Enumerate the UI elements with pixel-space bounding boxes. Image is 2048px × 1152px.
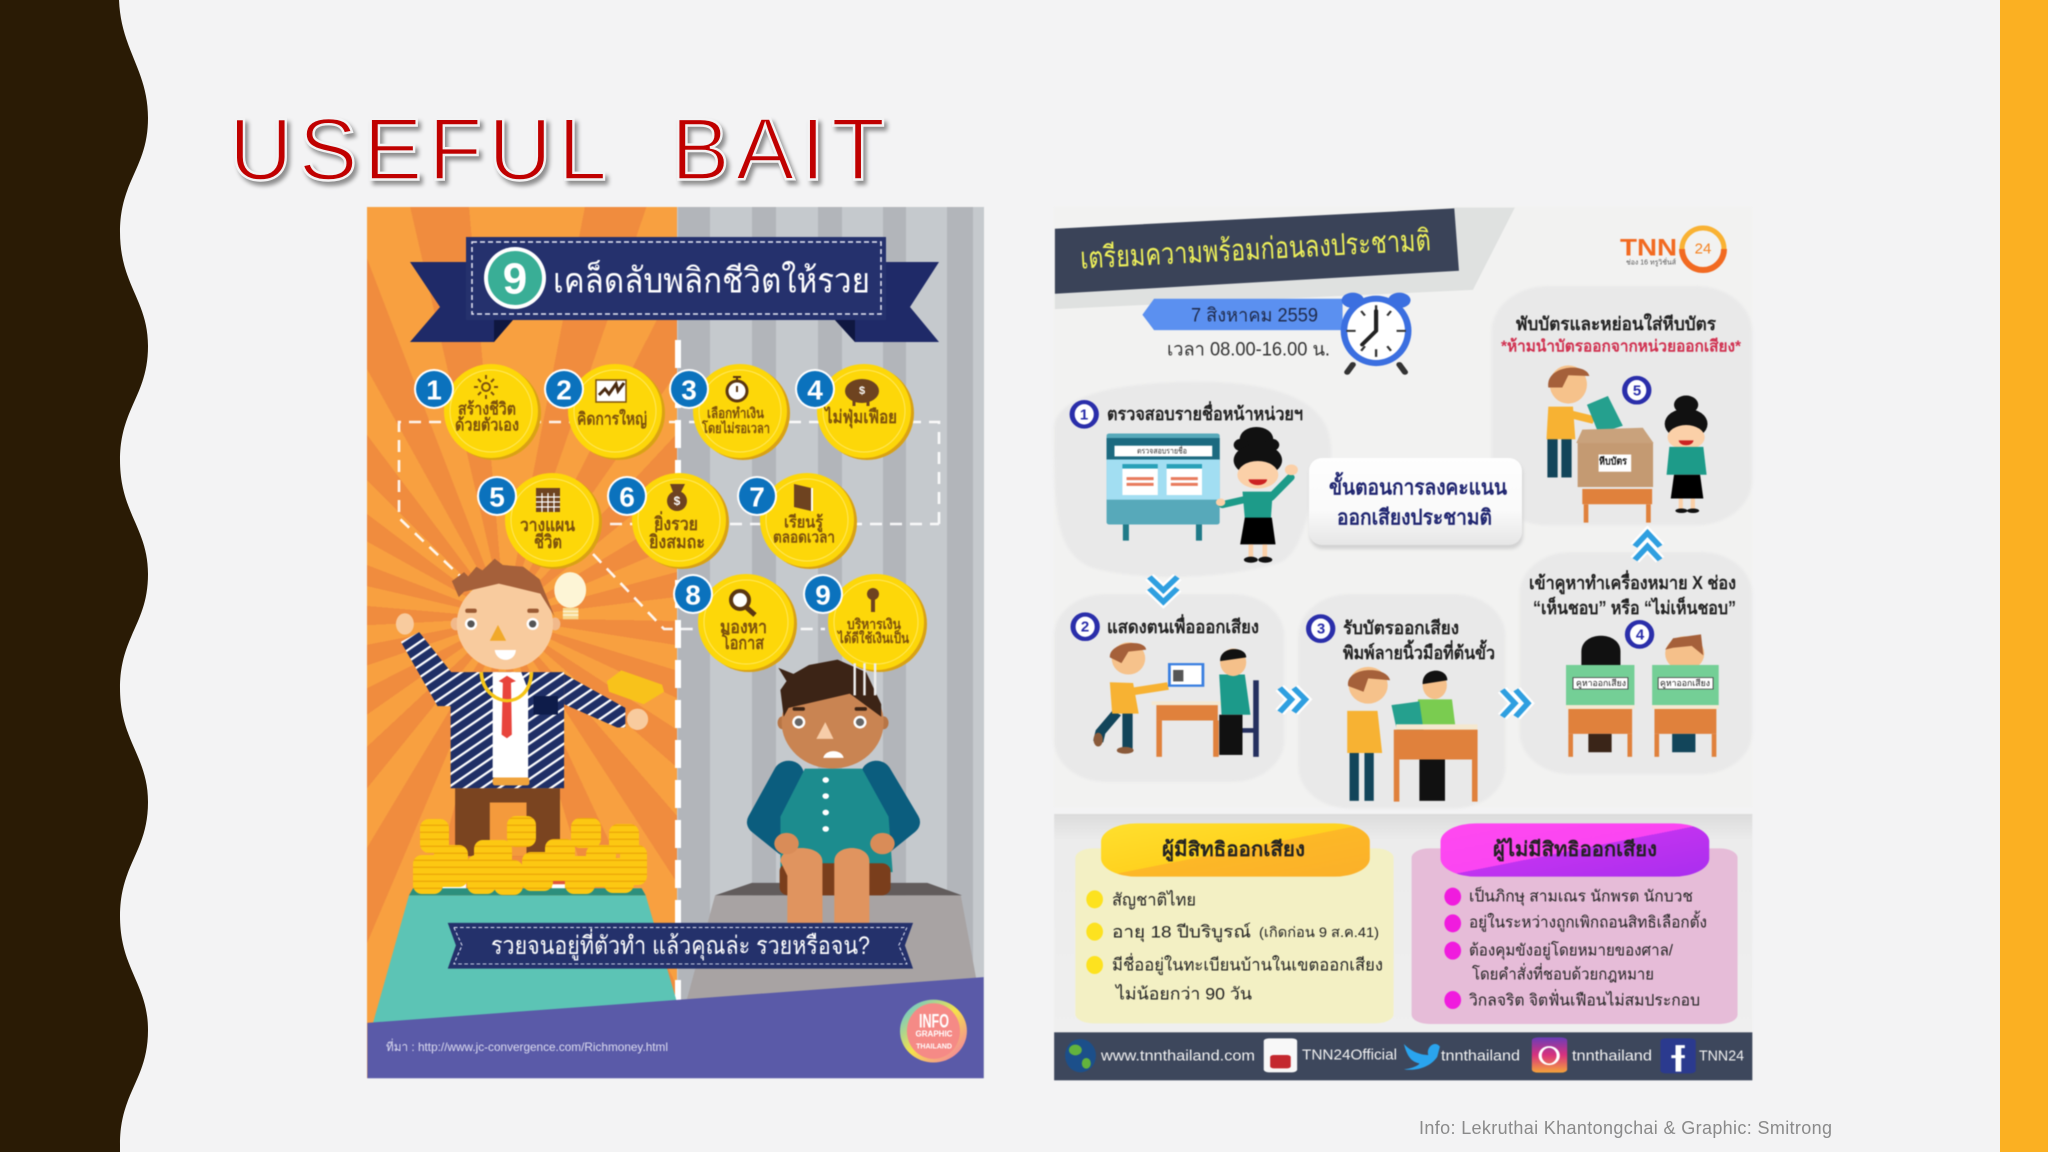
board and box labels: คูหาออกเสียง [1576,678,1626,689]
coin 6: ยิ่งรวยยิ่งสมถะ: ยิ่งรวย [654,511,698,534]
coin 9: บริหารเงินได้ดีใช้เงินเป็น: บริหารเงิน [847,616,901,632]
date arrow [1142,299,1343,330]
coin 5: วางแผนชีวิต: วางแผน [520,515,576,535]
ineligibility text [1469,837,1707,1010]
teal podium [372,879,678,1026]
ineligibility text: เป็นภิกษุ สามเณร นักพรต นักบวช [1469,886,1693,906]
grey podium [687,883,976,1001]
icon: instagram [1532,1037,1567,1073]
source text: ที่มา : http://www.jc-convergence.com/Richmoney.html [386,1038,668,1054]
social footer text: www.tnnthailand.com [1100,1048,1255,1064]
coin 7: เรียนรู้ตลอดเวลา: ตลอดเวลา [773,530,835,546]
coin 3: เลือกทำเงินโดยไม่รอเวลา: 3 [681,374,697,406]
logo text [916,1012,953,1050]
title: USEFUL BAIT [229,100,885,198]
section band [1054,814,1752,1033]
coin 6: ยิ่งรวยยิ่งสมถะ: ยิ่งสมถะ [649,529,705,552]
icon: globe [1065,1039,1096,1072]
coin 9: บริหารเงินได้ดีใช้เงินเป็น: ได้ดีใช้เงินเป็น [836,629,909,646]
icon: youtube [1264,1038,1297,1072]
ineligibility text: ต้องคุมขังอยู่โดยหมายของศาล/ [1469,940,1674,960]
logo: 24 [1695,240,1711,258]
centre card text [1329,472,1508,530]
gold coin stacks [413,816,647,895]
pink bullets [1444,888,1461,1009]
icon: light bulb [554,572,586,619]
step 5 scene [1546,365,1708,523]
coin 6: ยิ่งรวยยิ่งสมถะ: 6 [619,482,635,512]
coin 1: สร้างชีวิตด้วยตัวเอง: ด้วยตัวเอง [455,416,519,434]
step numbers and captions: *ห้ามนำบัตรออกจากหน่วยออกเสียง* [1501,336,1742,356]
coin 7: เรียนรู้ตลอดเวลา: เรียนรู้ [784,512,823,534]
coin 4: ไม่ฟุ่มเฟือย: $ [859,385,865,397]
social footer text: TNN24 [1699,1048,1744,1064]
date text: 7 สิงหาคม 2559 [1191,306,1318,326]
eligibility text: อายุ 18 ปีบริบูรณ์ [1112,922,1251,942]
step numbers and captions: พิมพ์ลายนิ้วมือที่ต้นขั้ว [1343,639,1495,663]
coin 3: เลือกทำเงินโดยไม่รอเวลา [669,364,790,460]
question text: รวยจนอยู่ที่ตัวทำ แล้วคุณล่ะ รวยหรือจน? [491,928,870,961]
eligible pill [1101,823,1370,877]
step numbers and captions: 4 [1636,626,1645,644]
title ribbon: เคล็ดลับพลิกชีวิตให้รวย [553,260,870,300]
right accent bar [2000,0,2048,1152]
eligibility text: ผู้มีสิทธิออกเสียง [1162,838,1305,863]
ineligibility text: วิกลจริต จิตฟั่นเฟือนไม่สมประกอบ [1469,988,1700,1010]
coin 2: คิดการใหญ่: คิดการใหญ่ [577,408,647,430]
coin 4: ไม่ฟุ่มเฟือย: ไม่ฟุ่มเฟือย [823,406,897,429]
coin 7: เรียนรู้ตลอดเวลา [737,473,857,569]
header shadow [1055,208,1515,309]
step numbers and captions: รับบัตรออกเสียง [1343,618,1459,638]
footer strip [1054,1032,1752,1080]
ineligible pill [1441,823,1709,877]
step numbers and captions: 3 [1317,620,1325,638]
poor man [762,660,905,924]
header text: เตรียมความพร้อมก่อนลงประชามติ [1079,224,1432,276]
logo text: THAILAND [916,1044,952,1050]
eligibility text: ไม่น้อยกว่า 90 วัน [1114,984,1252,1004]
coin 5: วางแผนชีวิต: ชีวิต [534,532,562,552]
ineligibility text: ผู้ไม่มีสิทธิออกเสียง [1493,837,1657,863]
number badges [1072,378,1652,647]
coin 2: คิดการใหญ่: 2 [556,374,572,406]
eligibility text: มีชื่ออยู่ในทะเบียนบ้านในเขตออกเสียง [1112,952,1383,976]
step numbers and captions [1080,313,1742,663]
title ribbon [410,237,939,342]
social footer text: TNN24Official [1302,1046,1397,1064]
centre card text: ออกเสียงประชามติ [1337,506,1492,530]
logo: infographic thailand [900,1000,967,1062]
step numbers and captions: ตรวจสอบรายชื่อหน้าหน่วยฯ [1107,401,1303,424]
woman officer [1216,427,1298,563]
credit line: Info: Lekruthai Khantongchai & Graphic: Smitrong [1419,1118,1832,1138]
coin 8: มองหาโอกาส: มองหา [720,617,767,637]
board and box labels [1137,444,1710,689]
header banner [1055,208,1459,294]
board and box labels: หีบบัตร [1599,456,1628,468]
coin 1: สร้างชีวิตด้วยตัวเอง: สร้างชีวิต [458,398,516,418]
step numbers and captions: 1 [1080,406,1088,424]
coin 5: วางแผนชีวิต: 5 [489,482,505,512]
step 4 scene [1566,634,1719,757]
eligibility section [1054,814,1752,1080]
panel: referendum voting infographic [1054,207,1752,1080]
coin 3: เลือกทำเงินโดยไม่รอเวลา: เลือกทำเงิน [707,405,764,421]
social footer text [1100,1046,1744,1064]
time text: เวลา 08.00-16.00 น. [1167,340,1330,360]
coin 1: สร้างชีวิตด้วยตัวเอง: 1 [426,374,442,406]
step 3 scene [1347,667,1478,802]
panel background [1054,207,1752,807]
dashed connector lines [399,422,939,629]
coin 8: มองหาโอกาส [673,574,797,672]
ineligibility text: โดยคำสั่งที่ชอบด้วยกฎหมาย [1472,962,1654,984]
step bubbles [1054,286,1752,808]
logo text: INFO [919,1012,949,1032]
logo text: GRAPHIC [916,1030,953,1038]
eligible panel [1075,848,1394,1023]
step numbers and captions: 2 [1081,618,1089,636]
panel: rich or poor infographic [367,207,984,1078]
icon: alarm clock [1341,293,1411,372]
coin 8: มองหาโอกาส: โอกาส [721,632,765,653]
coin 2: คิดการใหญ่ [544,364,665,460]
icon: twitter [1404,1044,1440,1070]
eligibility text: สัญชาติไทย [1112,890,1196,910]
centre dashed divider [675,340,681,1000]
step numbers and captions: 5 [1633,382,1641,400]
centre card text: ขั้นตอนการลงคะแนน [1329,472,1508,500]
logo [1620,228,1724,270]
eligibility text: (เกิดก่อน 9 ส.ค.41) [1259,924,1379,940]
logo: ช่อง 16 ทรูวิชั่นส์ [1626,258,1677,266]
step numbers and captions: เข้าคูหาทำเครื่องหมาย X ช่อง [1529,570,1736,595]
board and box labels: คูหาออกเสียง [1660,678,1710,689]
grey striped background [677,207,984,1078]
social footer text: tnnthailand [1572,1048,1652,1064]
step numbers and captions: แสดงตนเพื่อออกเสียง [1107,614,1259,637]
coin 6: ยิ่งรวยยิ่งสมถะ: $ [674,494,681,508]
logo: TNN [1620,234,1677,262]
board [1107,433,1220,541]
coin 8: มองหาโอกาส: 8 [685,580,701,610]
eligibility text [1112,838,1383,1004]
gold bars [607,670,664,704]
decorative wavy left edge [0,0,148,1152]
ineligibility text: อยู่ในระหว่างถูกเพิกถอนสิทธิเลือกตั้ง [1469,910,1707,932]
yellow bullets [1086,890,1103,974]
question banner [448,923,913,969]
icon: facebook [1660,1038,1696,1073]
social footer text: tnnthailand [1441,1048,1520,1064]
title ribbon: 9 [503,254,527,304]
orange sunburst background [367,207,678,1078]
coins with tips [414,364,927,672]
step numbers and captions: “เห็นชอบ” หรือ “ไม่เห็นชอบ” [1533,596,1736,618]
rich man [396,559,648,856]
coin 1: สร้างชีวิตด้วยตัวเอง [414,364,541,460]
lower illustration layer [367,923,984,1078]
coin 4: ไม่ฟุ่มเฟือย: 4 [807,374,823,406]
illustration layer in reference crop coordinates [372,559,976,1026]
step 2 scene [1094,642,1259,757]
step numbers and captions: พับบัตรและหย่อนใส่หีบบัตร [1516,313,1716,334]
coin 7: เรียนรู้ตลอดเวลา: 7 [749,482,765,512]
ineligible panel [1412,848,1738,1024]
coin 4: ไม่ฟุ่มเฟือย [795,364,914,460]
coin 5: วางแผนชีวิต [477,473,602,569]
coin 9: บริหารเงินได้ดีใช้เงินเป็น [803,574,927,672]
chevron arrows [1149,533,1660,717]
centre card [1309,458,1523,549]
purple footer band [367,977,984,1078]
board and box labels: ตรวจสอบรายชื่อ [1137,444,1187,456]
coin 6: ยิ่งรวยยิ่งสมถะ [607,473,729,569]
coin 9: บริหารเงินได้ดีใช้เงินเป็น: 9 [815,580,831,610]
coin 3: เลือกทำเงินโดยไม่รอเวลา: โดยไม่รอเวลา [701,419,770,436]
